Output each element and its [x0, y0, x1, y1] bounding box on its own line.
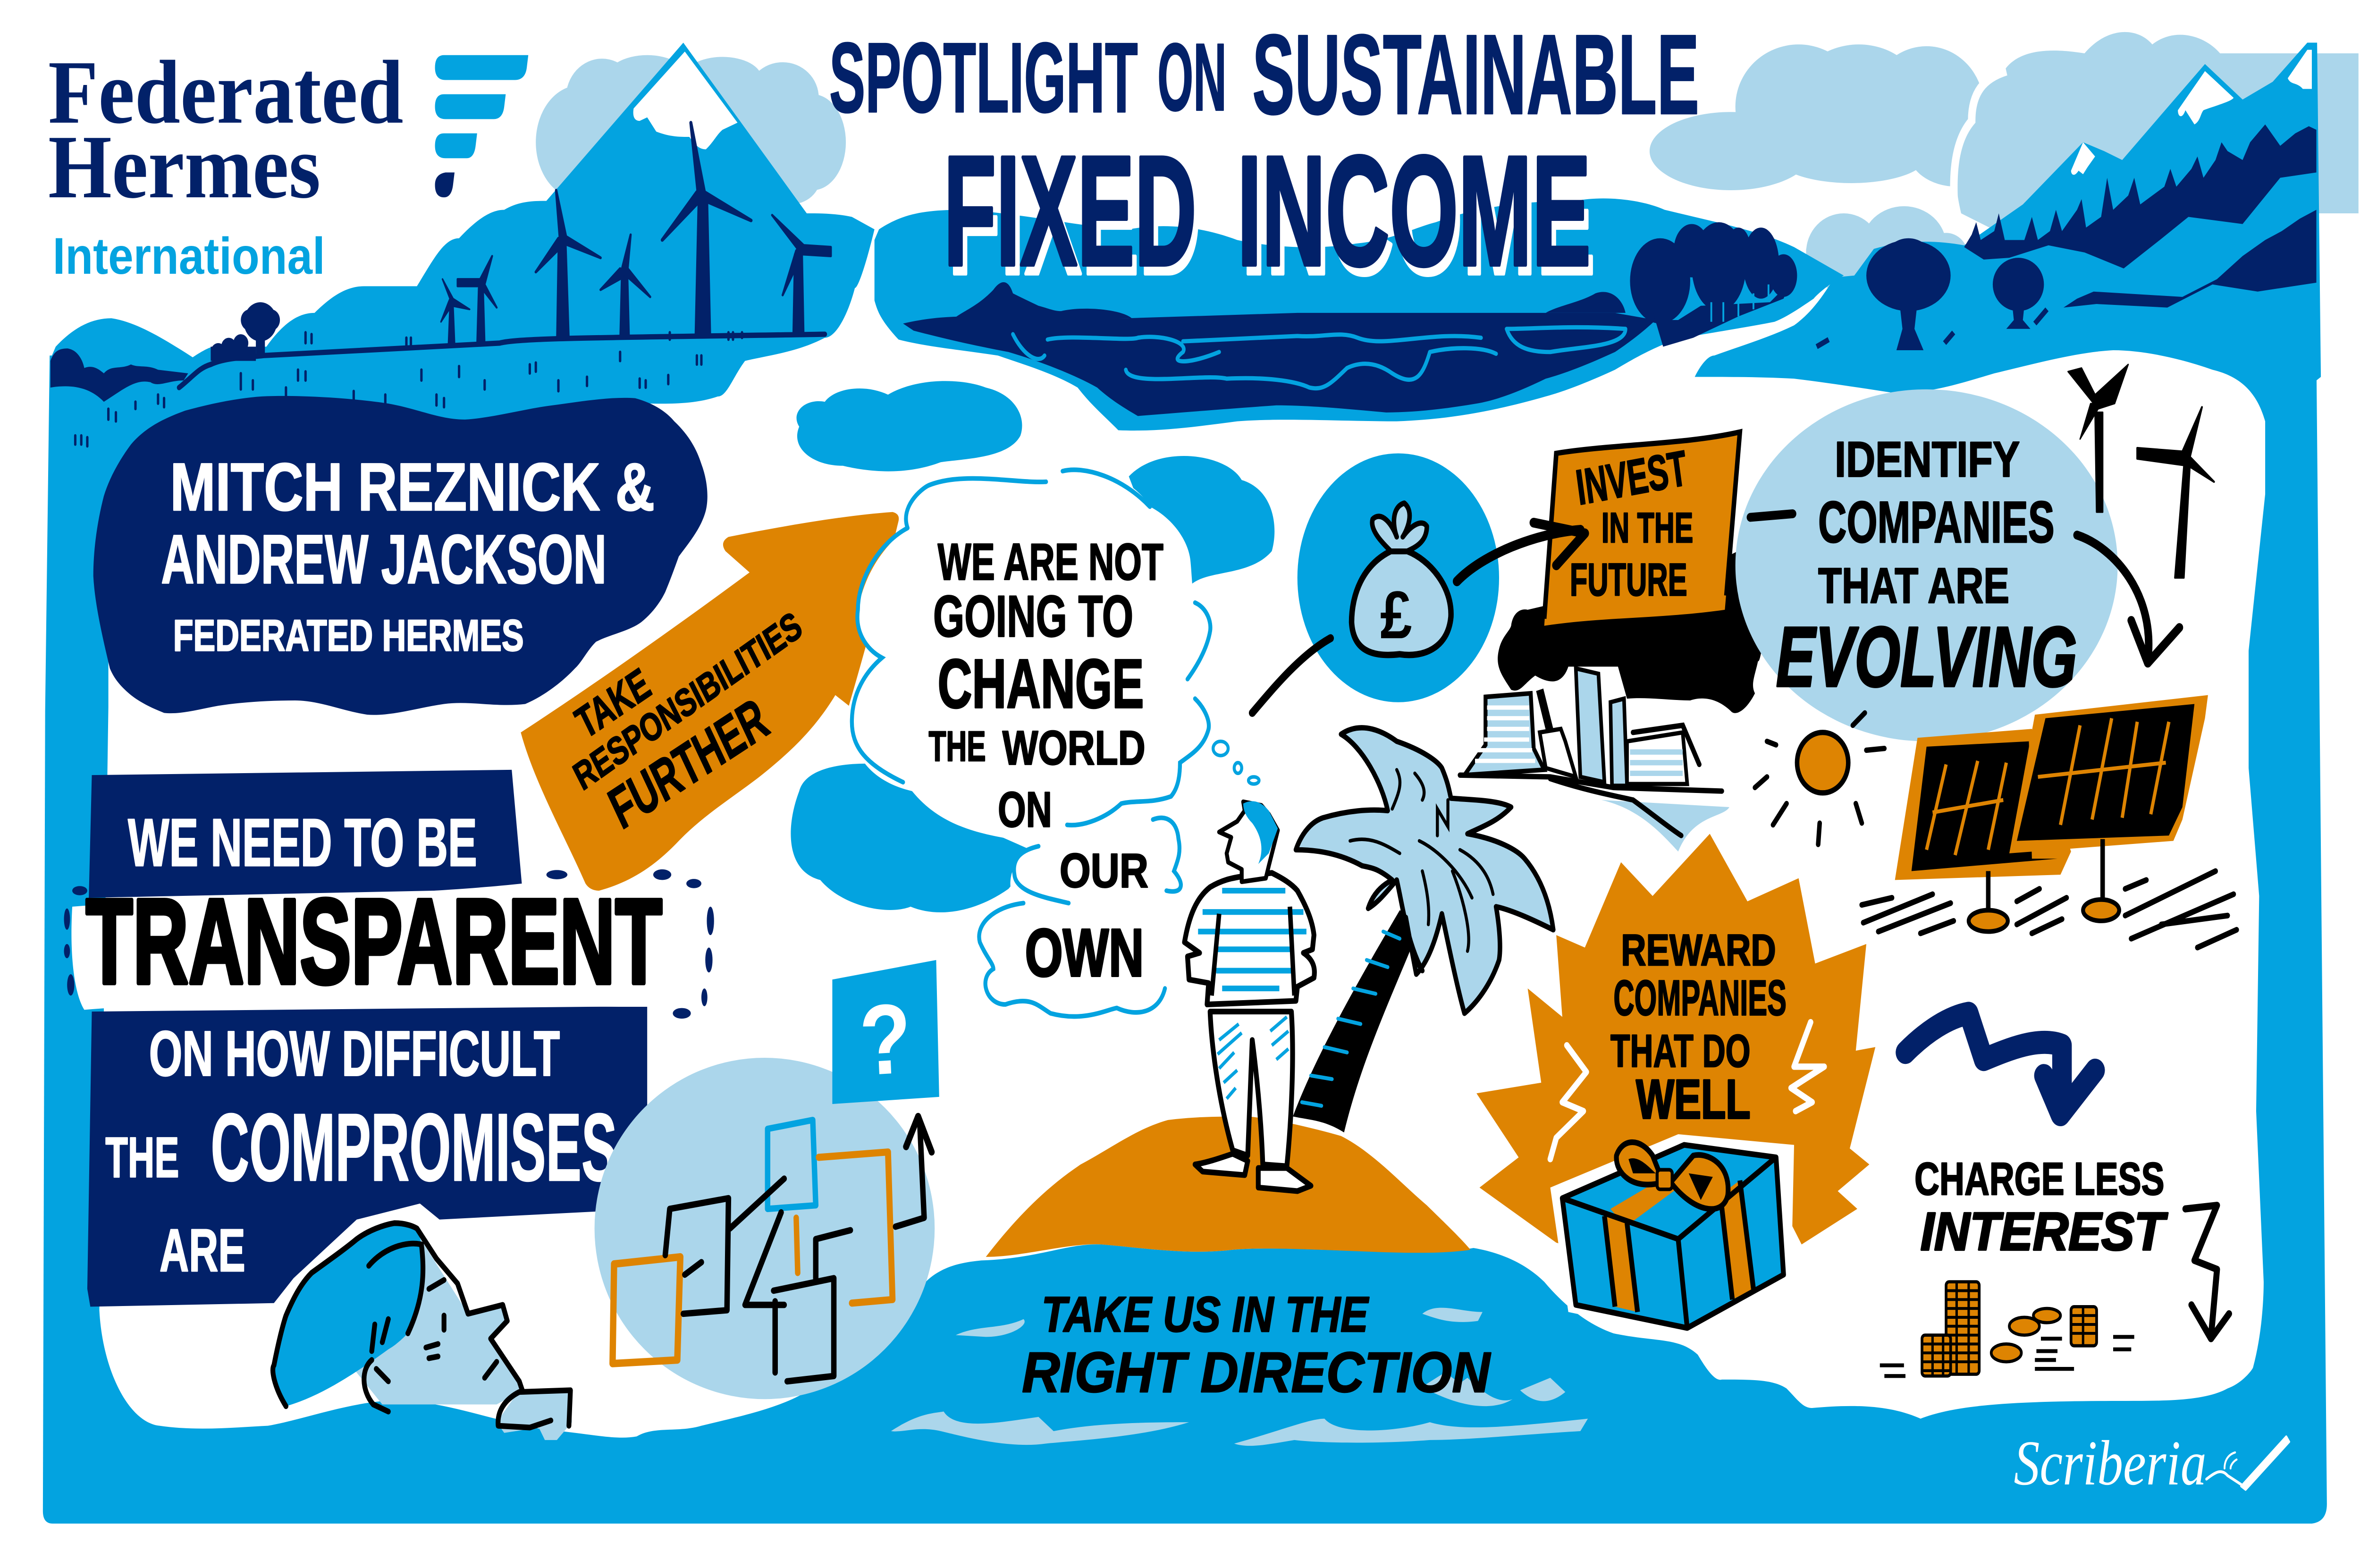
smoke: [1498, 547, 1791, 713]
icon: thinking face: [273, 1223, 572, 1440]
orange arrow: FURTHER: [600, 686, 777, 842]
panel: speakers: FEDERATED HERMES: [173, 611, 524, 660]
icon: black wind turbines: [2068, 364, 2214, 578]
panel: reward burst and gift: THAT DO: [1610, 1025, 1751, 1077]
panel: sea: RIGHT DIRECTION: [1022, 1340, 1491, 1404]
panel: thought bubble: CHANGE: [938, 645, 1144, 722]
right landscape with mountains: [1695, 42, 2321, 422]
panel: charge less interest: [1880, 1154, 2229, 1376]
panel: we need to be transparent: THE: [105, 1125, 179, 1189]
panel: thought bubble: THE: [928, 722, 986, 770]
grass ticks: [75, 332, 742, 446]
curved arrow: [2077, 535, 2179, 663]
panel: speakers: MITCH REZNICK &: [170, 450, 655, 525]
thought dots: [1213, 742, 1259, 784]
panel: invest sign: FUTURE: [1570, 554, 1687, 606]
panel: thought bubble: OUR: [1060, 844, 1148, 897]
title: [829, 11, 1699, 307]
panel: identify companies: COMPANIES: [1818, 490, 2055, 555]
panel: pound money bag: [1252, 453, 1499, 713]
panel: factory and smoke: [1460, 547, 1791, 851]
divider between clouds: [1954, 71, 2006, 231]
title: SPOTLIGHT: [829, 22, 1138, 134]
Scriberia signature: Scriberia: [2014, 1428, 2207, 1499]
question box: [832, 960, 939, 1104]
panel: we need to be transparent: ON HOW DIFFICULT: [149, 1018, 560, 1089]
wind turbines: [441, 123, 831, 343]
diagram boxes: [613, 1116, 932, 1382]
panel: sea: TAKE US IN THE: [1042, 1287, 1369, 1342]
wordmark: Federated: [48, 42, 404, 143]
navy zigzag arrow: [1905, 1013, 2095, 1115]
title: SUSTAINABLE: [1252, 11, 1699, 138]
panel: reward burst and gift: WELL: [1636, 1068, 1751, 1130]
lake: [903, 313, 1656, 416]
blue cloud right of bubble: [1129, 456, 1274, 587]
panel: charge less interest: INTEREST: [1921, 1202, 2168, 1262]
blue cloud lower left of bubble: [791, 764, 1038, 912]
panel: we need to be transparent: WE NEED TO BE: [128, 805, 477, 881]
stands: [1988, 839, 2103, 917]
panel: thought bubble: WE ARE NOT: [938, 533, 1163, 591]
mountain snow peak: [633, 51, 737, 149]
title: FIXED: [948, 133, 1201, 307]
white band: [71, 880, 712, 1010]
light ground: [1601, 800, 1729, 851]
panel: we need to be transparent: ARE: [160, 1217, 245, 1284]
title: FIXED: [944, 124, 1197, 298]
panel: sea: [891, 1287, 1588, 1446]
towers: [1576, 668, 1627, 786]
panel: we need to be transparent: TRANSPARENT: [86, 874, 662, 1009]
line to thought: [1252, 638, 1331, 713]
island: [986, 1116, 1470, 1257]
panel: thought bubble: OWN: [1025, 915, 1144, 991]
figure: man looking up: [1185, 801, 1315, 1191]
palm tree: [1293, 728, 1553, 1132]
panel: identify companies: IDENTIFY: [1835, 431, 2020, 487]
panel: identify companies: [1736, 389, 2179, 742]
forest band: [1964, 125, 2317, 269]
orange arrow: [521, 512, 899, 891]
blue page frame: [43, 355, 2327, 1524]
arrow to sign: [1457, 523, 1585, 582]
panel: charge less interest: CHARGE LESS: [1914, 1154, 2164, 1205]
panel: speakers: [93, 396, 708, 715]
dashed outline: [64, 869, 714, 1019]
orange arrow: RESPONSIBILITIES: [567, 604, 808, 799]
title: ON: [1157, 23, 1227, 131]
panel: identify companies: EVOLVING: [1776, 609, 2077, 705]
clouds: top right: [1650, 32, 2359, 292]
wordmark: [48, 42, 404, 217]
panel: identify companies: THAT ARE: [1818, 558, 2009, 613]
title: INCOME: [1242, 133, 1595, 307]
logo mark: [435, 55, 528, 197]
zigzag arrow: [2185, 1206, 2229, 1339]
left landscape with hills and mountain: [50, 42, 875, 569]
panel: invest sign: IN THE: [1601, 504, 1693, 551]
panel: speakers: ANDREW JACKSON: [161, 521, 607, 598]
panel: strategy diagram: ?: [857, 983, 914, 1096]
panel: reward burst and gift: COMPANIES: [1613, 970, 1787, 1026]
cloud behind mountain: [536, 55, 846, 204]
wordmark: Hermes: [48, 117, 320, 217]
panel: reward burst and gift: [1476, 834, 1875, 1337]
icon: solar panels: [1862, 695, 2237, 948]
gift box: [1550, 1134, 1794, 1337]
logo: [48, 42, 528, 285]
tree and bushes: [51, 302, 280, 402]
white interior: [99, 267, 2265, 1438]
trees: [1817, 238, 2047, 350]
title: INCOME: [1237, 124, 1591, 298]
panel: invest sign: INVEST: [1573, 440, 1690, 515]
panel: thought bubble: WORLD: [1003, 721, 1146, 775]
orange arrow: TAKE: [569, 659, 657, 748]
icon: sun: [1755, 713, 1884, 844]
panel: thought bubble: ON: [998, 782, 1052, 837]
panel: thought bubble: GOING TO: [933, 584, 1133, 649]
lower ridge: [2064, 210, 2317, 308]
panel: pound money bag: £: [1380, 578, 1412, 653]
coins: [1922, 1282, 2097, 1376]
river lines: [1013, 327, 1626, 388]
tree cluster: [1630, 222, 1797, 346]
panel: strategy diagram: [595, 960, 939, 1399]
International: International: [53, 228, 325, 285]
central hill with lake: [875, 198, 1844, 430]
ground hatch: [1862, 871, 2237, 948]
panel: invest sign: [1457, 432, 1740, 626]
panel: we need to be transparent: COMPROMISES: [211, 1093, 617, 1201]
waves: [891, 1308, 1588, 1446]
panel: thought bubble: [852, 468, 1259, 1020]
blue cloud top centre: [797, 381, 1022, 472]
panel: we need to be transparent: [64, 770, 714, 1307]
panel: reward burst and gift: REWARD: [1621, 926, 1776, 975]
ground line: [179, 334, 825, 388]
